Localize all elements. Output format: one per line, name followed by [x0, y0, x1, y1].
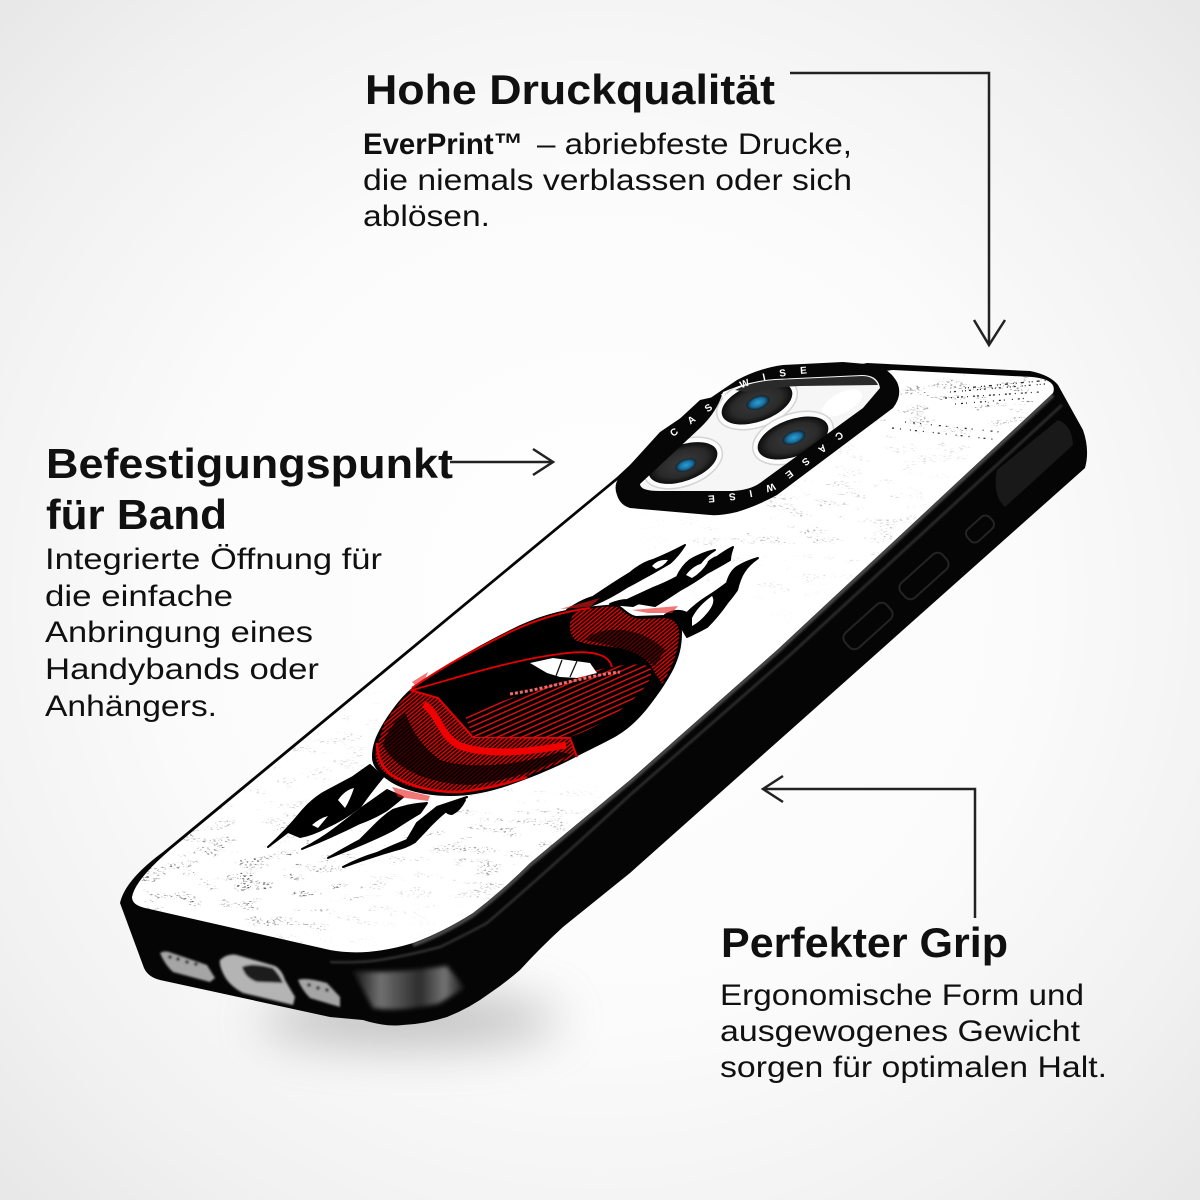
red ink splashes: [392, 598, 678, 801]
body text: die einfache: [45, 580, 233, 613]
body text: EverPrint™: [363, 128, 523, 161]
lips silhouette: [372, 604, 682, 796]
body text: ausgewogenes Gewicht: [720, 1015, 1081, 1048]
right speaker: [298, 979, 340, 1007]
arrow: print quality: [790, 73, 1005, 345]
body text: Anbringung eines: [45, 616, 313, 649]
flash: [818, 384, 866, 422]
heading: Perfekter Grip: [721, 919, 1008, 966]
lower lip hatching: [376, 690, 577, 792]
lip edge lines: [410, 690, 577, 757]
phone case product image: [120, 362, 1088, 1070]
body text: die niemals verblassen oder sich: [363, 164, 852, 197]
bottom ports: [160, 952, 340, 1007]
tongue: [465, 665, 651, 737]
upper lip shade: [585, 630, 665, 666]
body text: [45, 543, 382, 723]
callout: strap attachment: [45, 440, 453, 723]
lower lettering tendrils: [268, 765, 467, 867]
heading: Hohe Druckqualität: [365, 66, 775, 113]
body text: Anhängers.: [45, 690, 217, 723]
body text: ablösen.: [363, 200, 490, 233]
bottom corner highlight: [352, 966, 465, 1009]
camera window: [636, 370, 884, 498]
upper tendril counters: [652, 560, 713, 626]
screen back print: [132, 370, 1054, 952]
lower tendril counters: [312, 782, 436, 828]
upper lip left outline: [412, 608, 590, 688]
lens left: [637, 427, 729, 499]
heading: Befestigungspunkt: [46, 440, 453, 487]
heading: für Band: [46, 491, 227, 538]
case body: [120, 363, 1087, 1025]
lower lip bright band: [424, 704, 566, 752]
callout: print quality: [363, 66, 852, 233]
heading: [46, 440, 453, 538]
bumper lettering: CASEWISE: [708, 432, 843, 502]
rim sheen line: [330, 405, 1062, 962]
upper lettering tendrils: [567, 545, 758, 637]
body text: Integrierte Öffnung für: [45, 543, 382, 576]
charging port: [220, 955, 295, 1005]
lens right: [745, 401, 841, 475]
callout: grip: [720, 919, 1107, 1084]
drop shadow: [260, 994, 560, 1046]
side buttons: [841, 513, 997, 652]
body text: [720, 979, 1107, 1084]
camera bumper ring: [616, 362, 899, 515]
distressed speckle texture: [140, 370, 1048, 948]
arrow: strap attachment: [450, 449, 553, 475]
bumper lettering: CASEWISE: [670, 366, 807, 436]
screen edge sheen: [413, 395, 1053, 945]
bumper lettering: [670, 366, 843, 502]
left speaker: [160, 952, 215, 982]
teeth: [530, 658, 597, 678]
bumper inner shade: [735, 376, 878, 393]
body text: Handybands oder: [45, 653, 319, 686]
body text: – abriebfeste Drucke,: [537, 128, 852, 161]
lower lip shade: [383, 712, 572, 785]
lens top: [709, 366, 805, 440]
lips artwork: [268, 545, 758, 867]
body text: sorgen für optimalen Halt.: [720, 1051, 1107, 1084]
side ridge: [996, 420, 1073, 507]
arrow: grip: [763, 776, 975, 918]
upper lip hatching: [570, 607, 679, 684]
body text: [363, 128, 852, 233]
body text: Ergonomische Form und: [720, 979, 1084, 1012]
dense top-right speckles: [892, 380, 1050, 440]
